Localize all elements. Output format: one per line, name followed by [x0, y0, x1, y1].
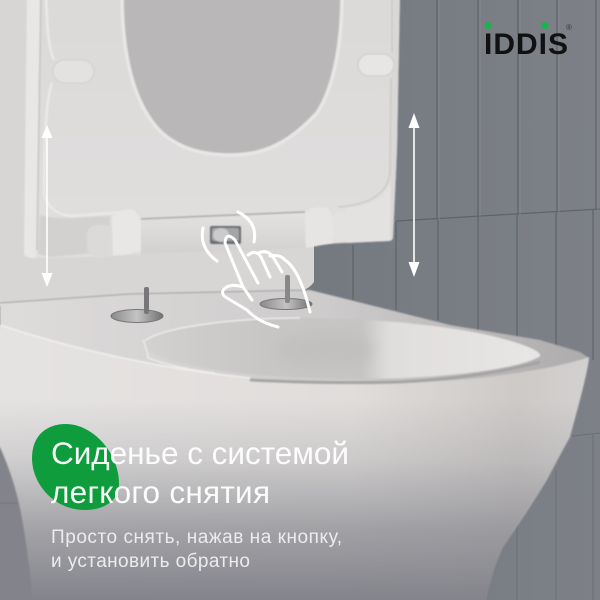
heading	[51, 435, 349, 510]
subtext: Просто снять, нажав на кнопку,	[51, 527, 342, 548]
toilet bowl	[0, 290, 589, 600]
toilet tank back panel	[0, 0, 314, 306]
outer rim	[24, 0, 40, 258]
inner bowl shadow	[275, 332, 375, 368]
heading: легкого снятия	[51, 474, 270, 510]
heading: Сиденье с системой	[51, 435, 349, 471]
bottom gradient overlay	[0, 400, 580, 600]
front surface	[0, 325, 589, 600]
subtext	[51, 527, 342, 572]
rim deck	[0, 290, 589, 420]
bowl opening	[144, 318, 540, 379]
left mount bolt	[111, 287, 163, 322]
release button	[210, 226, 241, 244]
left vertical arrow	[42, 125, 52, 287]
logo: IDDIS: IDDIS	[484, 28, 568, 61]
subtext: и установить обратно	[51, 551, 250, 572]
green blob	[32, 424, 119, 510]
seat opening	[122, 0, 342, 155]
seat hinge bar	[87, 207, 348, 257]
rim lines	[250, 362, 540, 383]
icon: pressing hand	[202, 212, 310, 327]
right vertical arrow	[408, 113, 420, 277]
logo: IDDIS: ®	[566, 23, 572, 32]
right mount bolt	[260, 275, 312, 310]
lower recess under lid	[38, 215, 110, 257]
toilet seat lid raised	[24, 0, 400, 258]
inner ledge line	[44, 0, 125, 216]
left bumper	[53, 60, 94, 83]
right bumper	[358, 54, 394, 76]
left pedestal shadow	[0, 447, 33, 600]
